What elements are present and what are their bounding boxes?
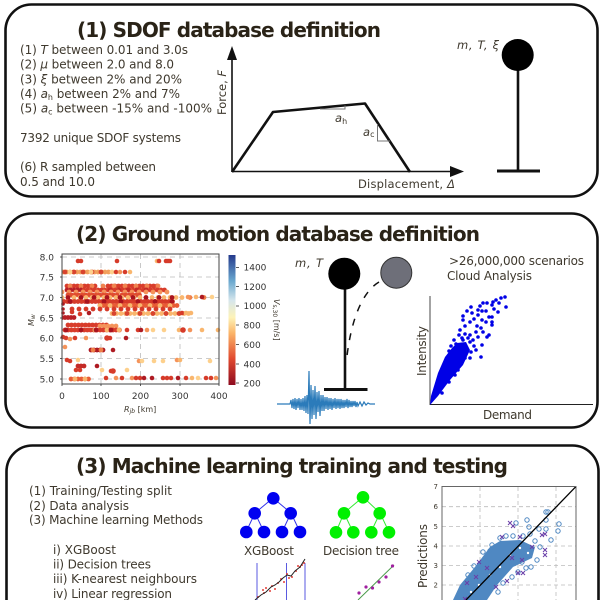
prediction scatter chart: 2 (434, 582, 438, 590)
cloud analysis scatter: Intensity (415, 326, 429, 376)
colour bar: Vs30 (228, 255, 281, 390)
scatter map: magnitude against distance: 100 (92, 392, 110, 402)
colour bar: Vs30: [m/s] (272, 317, 281, 341)
colour bar: Vs30: 800 (244, 322, 261, 332)
SDOF stick model (457, 38, 540, 171)
force-displacement chart: c (370, 130, 374, 139)
parameter list (20, 43, 212, 189)
structure under shaking (295, 256, 412, 390)
scatter map: magnitude against distance: 6.0 (40, 334, 54, 344)
seismic wave trace (277, 371, 375, 424)
panel: SDOF database definition (6, 4, 598, 196)
parameter list: between 2% and 7% (53, 87, 180, 101)
force-displacement chart: Force, F (215, 70, 229, 115)
force-displacement chart: h (342, 117, 347, 126)
icon: XGBoost tree (240, 492, 306, 558)
parameter list: (6) R sampled between (20, 160, 156, 174)
colour bar: Vs30: 200 (244, 380, 261, 390)
force-displacement chart (215, 46, 464, 191)
prediction scatter chart: 4 (434, 542, 439, 550)
scatter map: magnitude against distance: 200 (132, 392, 149, 402)
parameter list: (5) a (20, 102, 48, 116)
text: scenario count: Cloud Analysis (447, 269, 532, 283)
prediction scatter chart: 6 (434, 503, 439, 511)
method list: ii) Decision trees (53, 558, 151, 572)
icon: XGBoost tree: XGBoost (244, 544, 294, 558)
scatter map: magnitude against distance: 400 (210, 392, 228, 402)
scatter map: magnitude against distance: 6.5 (40, 314, 54, 324)
method list: (3) Machine learning Methods (29, 513, 203, 527)
scatter map: magnitude against distance: M (27, 319, 36, 326)
method list: iii) K-nearest neighbours (53, 572, 197, 586)
cloud analysis scatter (415, 295, 593, 422)
structure under shaking: m, T (295, 256, 324, 270)
panel: Ground motion database definition (6, 214, 598, 428)
colour bar: Vs30: s,30 (271, 304, 278, 317)
method list: i) XGBoost (53, 543, 116, 557)
prediction scatter chart: 7 (434, 483, 438, 491)
parameter list: h (48, 93, 53, 102)
SDOF stick model: m, T, ξ (457, 38, 500, 52)
parameter list: c (48, 108, 53, 116)
cloud analysis scatter: Demand (483, 408, 532, 422)
scatter map: magnitude against distance: w (30, 314, 37, 319)
colour bar: Vs30: 1400 (244, 264, 267, 274)
scatter map: magnitude against distance (27, 254, 228, 415)
small chart: boosted fit (255, 559, 305, 600)
panel: Machine learning training and testing (6, 446, 598, 600)
heading: panel 1: (1) SDOF database definition (77, 18, 381, 42)
method list (29, 484, 203, 600)
force-displacement chart: Displacement, Δ (358, 177, 455, 191)
prediction scatter chart: Predictions (416, 524, 430, 588)
scatter map: magnitude against distance: jb (129, 408, 135, 415)
heading: panel 3: (3) Machine learning training and testing (76, 454, 508, 478)
method list: (1) Training/Testing split (29, 484, 172, 498)
scatter map: magnitude against distance: 8.0 (40, 254, 54, 264)
text: scenario count: >26,000,000 scenarios (449, 254, 584, 268)
colour bar: Vs30: 400 (244, 360, 261, 370)
icon: decision tree (323, 491, 399, 558)
prediction scatter chart: 5 (434, 523, 438, 531)
icon: decision tree: Decision tree (323, 544, 399, 558)
parameter list: between -15% and -100% (53, 102, 212, 116)
scatter map: magnitude against distance: 0 (59, 392, 65, 402)
prediction scatter chart (416, 483, 576, 600)
scatter map: magnitude against distance: R (124, 405, 130, 414)
colour bar: Vs30: 1000 (244, 302, 267, 312)
parameter list: (1) T between 0.01 and 3.0s (20, 43, 188, 57)
colour bar: Vs30: 600 (244, 341, 261, 351)
parameter list: (4) a (20, 87, 48, 101)
parameter list: (3) ξ between 2% and 20% (20, 72, 182, 86)
parameter list: 7392 unique SDOF systems (20, 131, 181, 145)
scatter map: magnitude against distance: 5.0 (40, 376, 54, 386)
heading: panel 2: (2) Ground motion database definition (76, 222, 480, 246)
colour bar: Vs30: 1200 (244, 283, 267, 293)
small chart: linear fit (357, 564, 394, 600)
parameter list: 0.5 and 10.0 (20, 175, 95, 189)
scatter map: magnitude against distance: [km] (135, 405, 156, 414)
method list: (2) Data analysis (29, 499, 129, 513)
text: scenario count (447, 254, 584, 283)
force-displacement chart: a (335, 111, 342, 125)
scatter map: magnitude against distance: 7.0 (40, 294, 54, 304)
colour bar: Vs30: V (272, 299, 281, 305)
scatter map: magnitude against distance: 5.5 (40, 355, 54, 365)
scatter map: magnitude against distance: 7.5 (40, 274, 54, 284)
prediction scatter chart: 3 (434, 562, 438, 570)
scatter map: magnitude against distance: 300 (171, 392, 189, 402)
force-displacement chart: a (363, 125, 370, 139)
parameter list: (2) μ between 2.0 and 8.0 (20, 58, 174, 72)
